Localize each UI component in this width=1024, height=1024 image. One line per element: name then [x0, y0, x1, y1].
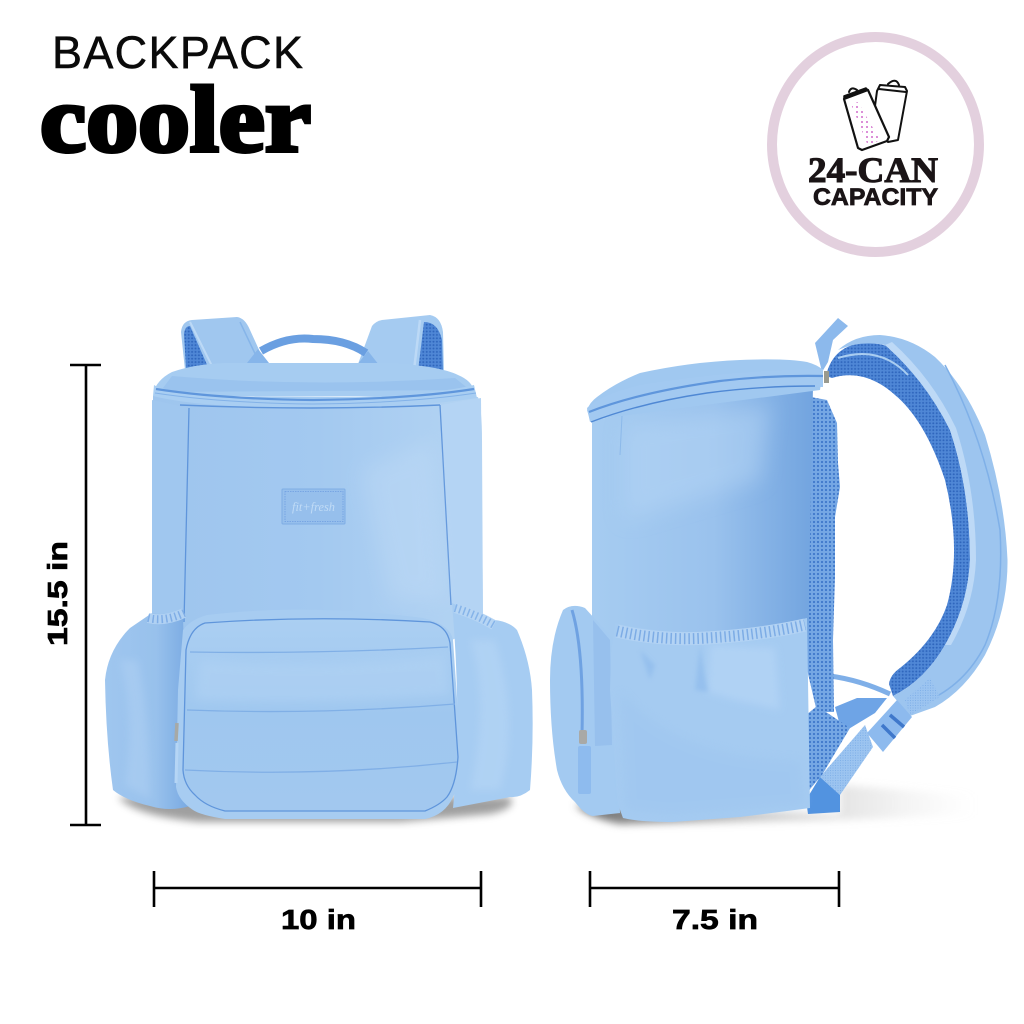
shoulder straps [181, 315, 444, 372]
title [40, 27, 311, 172]
body highlight [625, 405, 770, 520]
body seam [620, 416, 622, 455]
quilting lines [185, 647, 457, 772]
text: 24-CAN: 24-CAN [808, 150, 938, 190]
right panel highlight [440, 398, 483, 622]
left side pocket [105, 610, 190, 809]
top tab [815, 318, 848, 372]
dimension: depth 7.5 in [590, 871, 839, 935]
badge: 24-can capacity [772, 37, 979, 252]
handle anchors [247, 349, 379, 365]
side pocket [610, 618, 810, 822]
back mesh panel [800, 395, 840, 712]
lower back mesh [800, 706, 850, 795]
backpack front view [105, 315, 533, 822]
dimension: height 15.5 in [42, 365, 101, 825]
zipper teeth [156, 389, 474, 400]
side panel tint [152, 400, 189, 625]
zip pull [176, 723, 177, 741]
heading: cooler: cooler [40, 68, 311, 172]
zipper teeth [589, 376, 823, 412]
quilt highlight [195, 655, 450, 702]
base corner [806, 777, 840, 814]
body seams [184, 405, 451, 622]
strap tab [905, 678, 940, 715]
pocket panel [183, 619, 458, 811]
label: 10 in: 10 in [281, 904, 356, 935]
lower straps [820, 676, 940, 795]
logo patch [282, 489, 345, 524]
zipper band [153, 385, 477, 408]
lid shading [160, 376, 470, 392]
badge ring [772, 37, 979, 252]
dimension: width 10 in [154, 871, 481, 935]
inner strap edge [838, 354, 908, 375]
label: 7.5 in: 7.5 in [672, 904, 758, 935]
main body [592, 387, 813, 640]
top handle [261, 338, 366, 353]
right side pocket [452, 603, 533, 808]
zipper pull [824, 371, 829, 383]
pocket elastic [617, 625, 805, 639]
front pocket side [550, 606, 620, 816]
zip pull [579, 730, 587, 744]
zipper band [587, 369, 823, 422]
main body [152, 396, 483, 640]
ground shadows [575, 785, 975, 824]
lid [587, 359, 823, 420]
pocket folds [708, 645, 780, 710]
mesh lining [826, 343, 970, 696]
strap highlight [885, 342, 976, 645]
icon: two cans [844, 81, 907, 150]
ground shadow [118, 797, 512, 822]
lid [155, 363, 473, 396]
label: 15.5 in: 15.5 in [42, 541, 73, 646]
strap pad [838, 335, 1008, 716]
text: CAPACITY: CAPACITY [813, 184, 938, 211]
front quilted pocket [176, 610, 461, 819]
strap stitch [925, 365, 1001, 702]
backpack side view [550, 318, 1008, 824]
shoulder strap [815, 318, 1008, 716]
fabric highlight [360, 440, 445, 600]
buckle [867, 700, 912, 752]
heading: BACKPACK: BACKPACK [52, 27, 303, 78]
webbing [820, 725, 873, 795]
zipper lower edge [180, 405, 440, 408]
zipper lower edge [591, 386, 815, 422]
logo text: fit+fresh [292, 499, 335, 514]
